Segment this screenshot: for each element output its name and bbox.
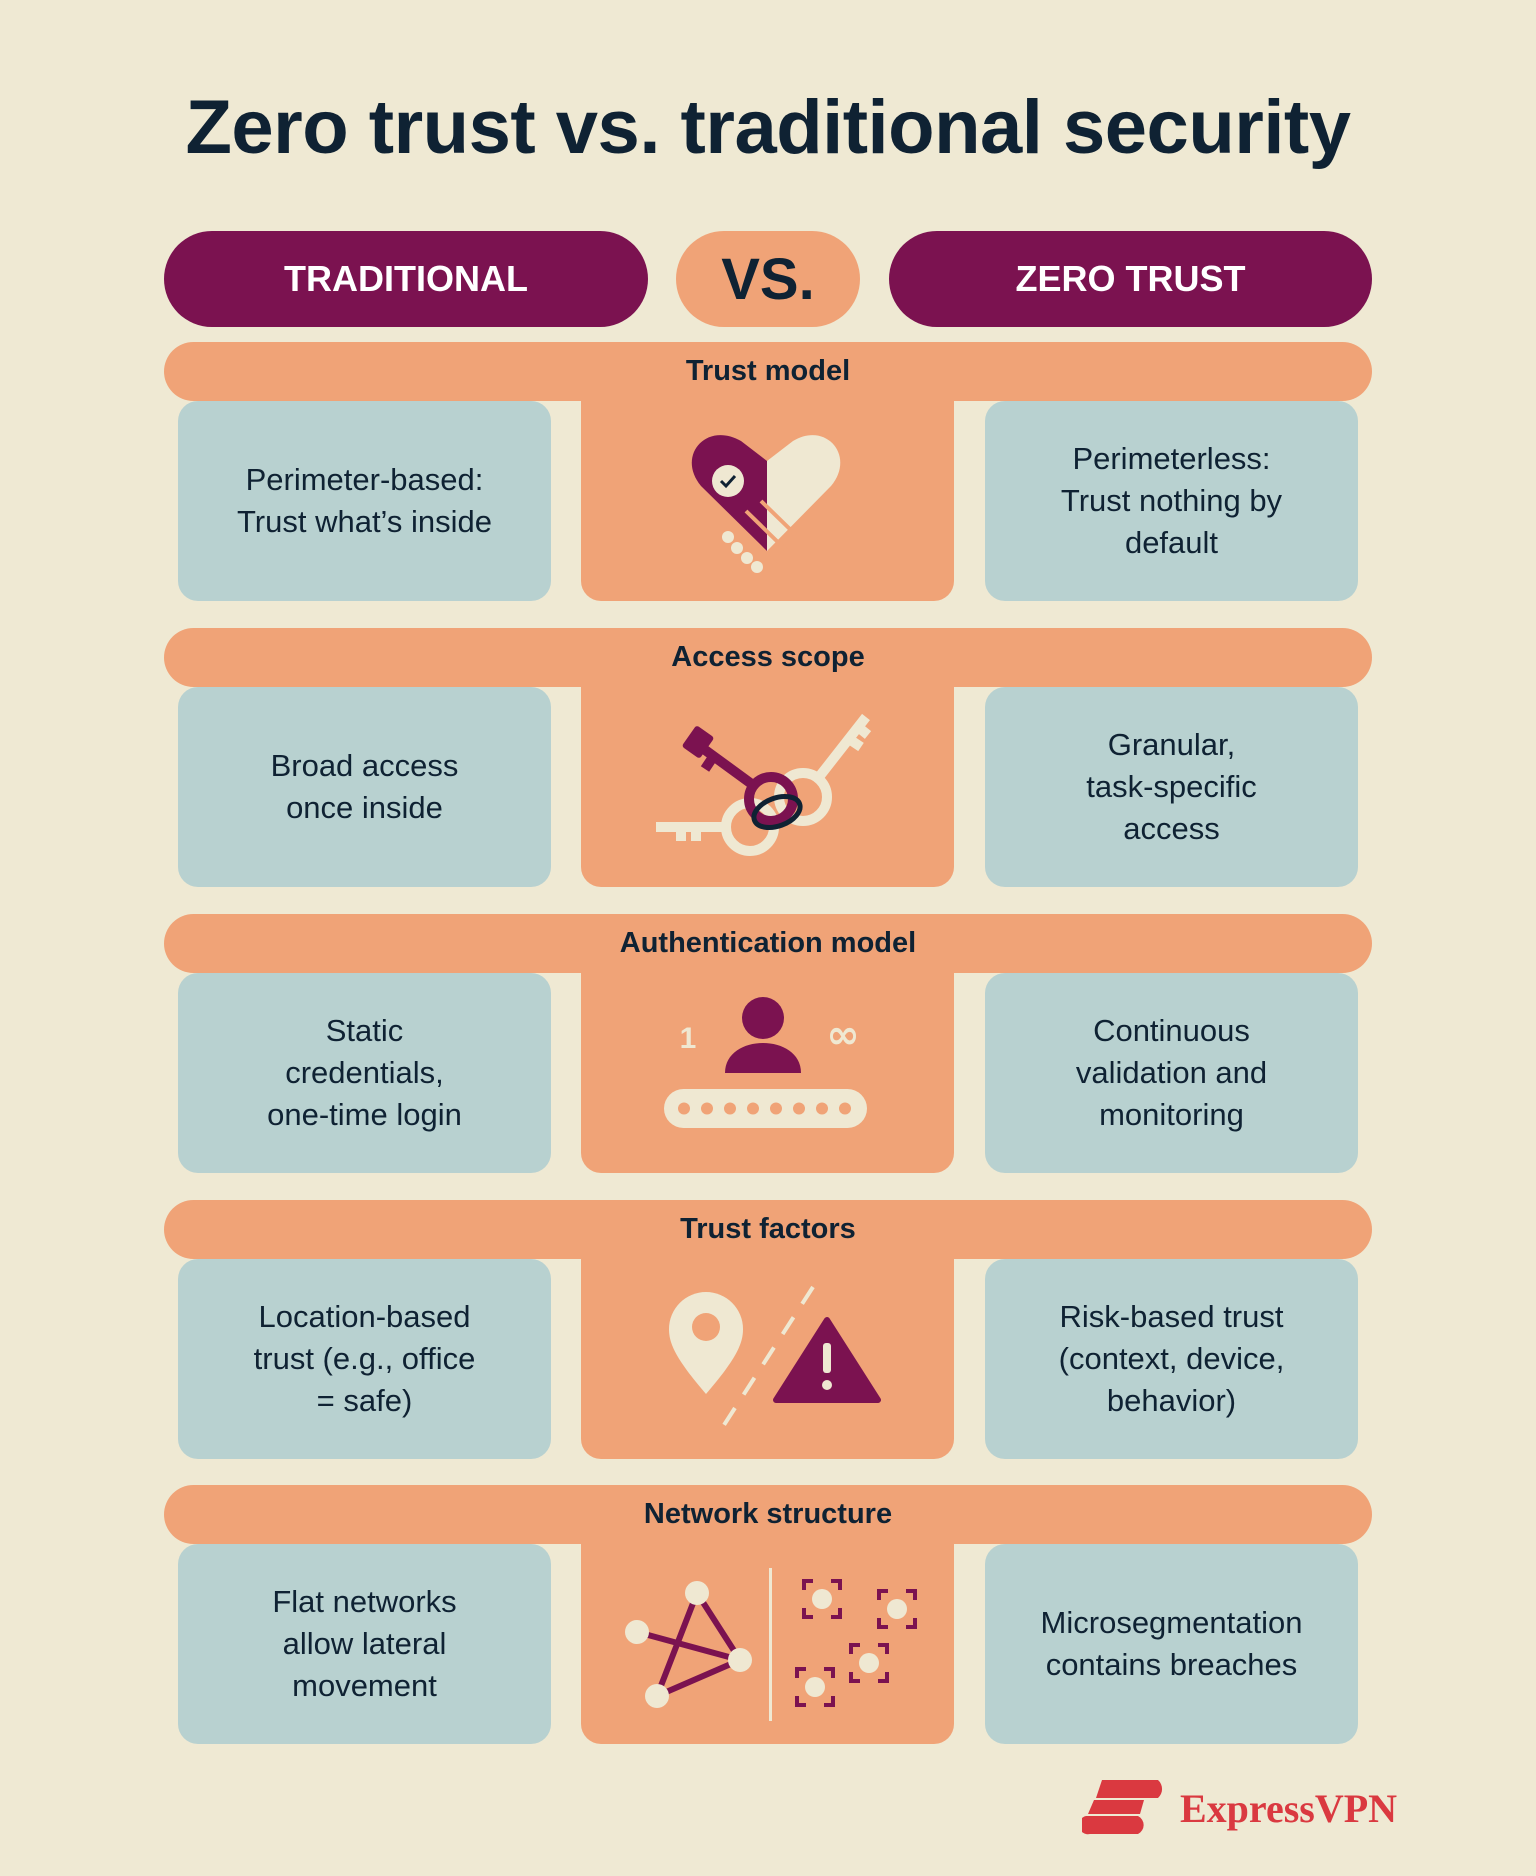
heading: Trust factors xyxy=(680,1213,856,1245)
pill: vs xyxy=(676,231,860,327)
text: traditional: Location-based xyxy=(258,1299,470,1334)
heading: Authentication model xyxy=(620,927,916,959)
icon: network vs microsegments xyxy=(581,1544,954,1744)
logo: ExpressVPN xyxy=(1082,1780,1397,1834)
text: traditional: trust (e.g., office xyxy=(254,1341,475,1376)
pill: zero trust: ZERO TRUST xyxy=(1016,258,1246,299)
heading: Trust model xyxy=(686,355,850,387)
icon: keys xyxy=(581,687,954,887)
section: access scope xyxy=(164,628,1372,887)
text: zero trust xyxy=(985,687,1358,887)
text: zero trust: Continuous xyxy=(1093,1013,1250,1048)
text: zero trust: Trust nothing by xyxy=(1061,483,1282,518)
heading xyxy=(164,1200,1372,1259)
text: traditional: one-time login xyxy=(267,1097,462,1132)
text: traditional: Perimeter-based: xyxy=(246,462,483,497)
pill: zero trust xyxy=(889,231,1372,327)
text: traditional: Static xyxy=(326,1013,403,1048)
text: traditional: Flat networks xyxy=(272,1584,457,1619)
icon: login: 1 xyxy=(680,1022,696,1055)
section: network structure xyxy=(164,1485,1372,1744)
text: zero trust: Risk-based trust xyxy=(1060,1299,1283,1334)
text: zero trust: (context, device, xyxy=(1059,1341,1284,1376)
text: traditional: movement xyxy=(292,1668,437,1703)
text: zero trust: contains breaches xyxy=(1046,1647,1297,1682)
title: Zero trust vs. traditional security xyxy=(185,85,1351,170)
text: traditional: once inside xyxy=(286,790,443,825)
text: traditional: Trust what’s inside xyxy=(237,504,492,539)
text: traditional xyxy=(178,1259,551,1459)
text: traditional: allow lateral xyxy=(283,1626,446,1661)
text: traditional: credentials, xyxy=(285,1055,444,1090)
icon: login: ∞ xyxy=(826,1012,860,1058)
text: zero trust: Microsegmentation xyxy=(1041,1605,1302,1640)
pill: traditional xyxy=(164,231,648,327)
text: zero trust xyxy=(985,973,1358,1173)
text: traditional xyxy=(178,401,551,601)
pill: vs: VS. xyxy=(721,246,815,312)
text: zero trust xyxy=(985,401,1358,601)
section: trust factors xyxy=(164,1200,1372,1459)
text: traditional: Broad access xyxy=(271,748,458,783)
text: traditional xyxy=(178,973,551,1173)
section: trust model xyxy=(164,342,1372,601)
heading: Network structure xyxy=(644,1498,892,1530)
text: zero trust xyxy=(985,1544,1358,1744)
heading xyxy=(164,1485,1372,1544)
text: traditional: = safe) xyxy=(317,1383,412,1418)
text: zero trust: default xyxy=(1125,525,1218,560)
text: traditional xyxy=(178,1544,551,1744)
icon: location vs warning xyxy=(581,1259,954,1459)
text: zero trust: task-specific xyxy=(1086,769,1257,804)
text: zero trust xyxy=(985,1259,1358,1459)
heading xyxy=(164,342,1372,401)
logo: ExpressVPN: ExpressVPN xyxy=(1180,1786,1397,1831)
text: zero trust: Perimeterless: xyxy=(1072,441,1271,476)
text: zero trust: monitoring xyxy=(1099,1097,1244,1132)
heading: Access scope xyxy=(671,641,865,673)
text: zero trust: Granular, xyxy=(1108,727,1235,762)
icon: login xyxy=(581,973,954,1173)
pill: traditional: TRADITIONAL xyxy=(284,258,528,299)
heading xyxy=(164,914,1372,973)
text: zero trust: validation and xyxy=(1076,1055,1267,1090)
icon: handshake heart xyxy=(581,401,954,601)
text: zero trust: access xyxy=(1123,811,1220,846)
text: zero trust: behavior) xyxy=(1107,1383,1236,1418)
heading xyxy=(164,628,1372,687)
text: traditional xyxy=(178,687,551,887)
section: authentication model xyxy=(164,914,1372,1173)
